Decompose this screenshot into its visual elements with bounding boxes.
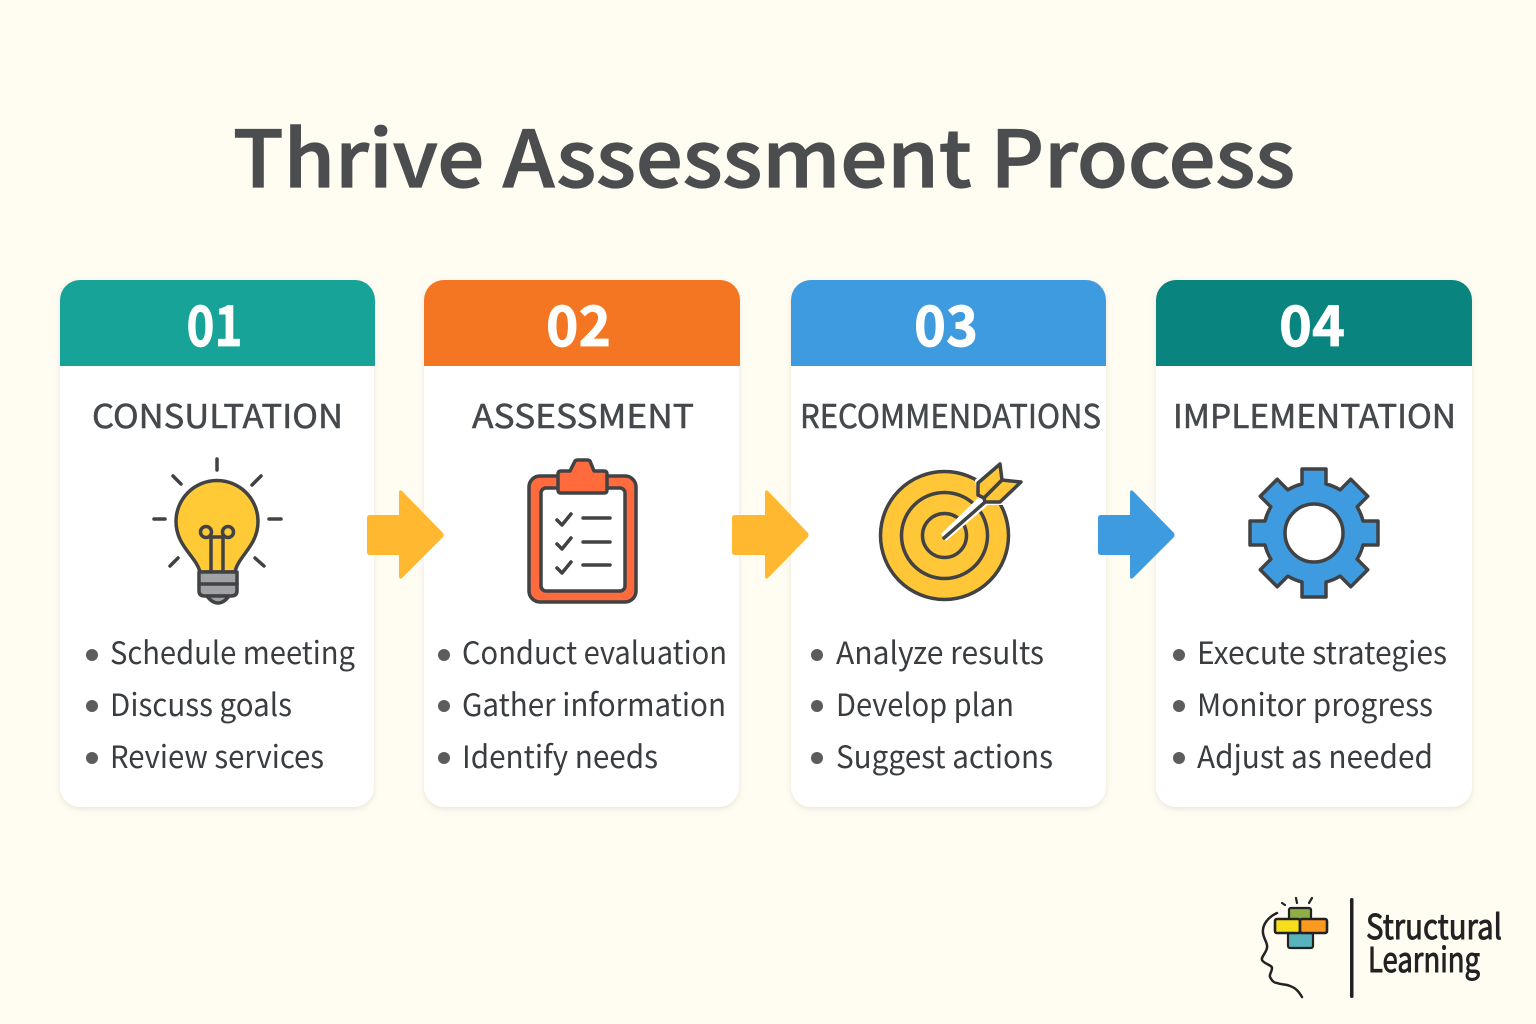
list: consultation bullets: Discuss goals [110,680,292,725]
list: recommendations bullets [811,628,1053,777]
list: assessment bullets: Conduct evaluation [462,628,727,673]
logo wordmark: Learning [1368,933,1480,982]
icon: clipboard [529,460,636,602]
list: consultation bullets [86,628,355,777]
icon: head with blocks [1262,898,1327,997]
panel: step 01 consultation [60,280,375,807]
arrow: step 2 to 3 [732,490,808,579]
logo wordmark: Structural [1366,900,1502,949]
list: consultation bullets: Schedule meeting [110,628,355,673]
heading: consultation: CONSULTATION [92,390,343,438]
panel: step 03 recommendations [791,280,1106,807]
header: 01: 01 [186,282,242,363]
list: implementation bullets [1173,628,1447,777]
header: 03: 03 [914,282,978,363]
list: implementation bullets: Adjust as needed [1197,732,1433,777]
list: implementation bullets: Execute strategies [1197,628,1447,673]
arrow: step 1 to 2 [367,490,444,579]
heading: assessment: ASSESSMENT [472,390,694,438]
panel: step 02 assessment [424,280,740,807]
logo: Structural Learning [1262,898,1502,998]
header: 04: 04 [1279,282,1345,363]
list: recommendations bullets: Suggest actions [836,732,1053,777]
title: Thrive Assessment Process [233,98,1295,210]
logo wordmark [1366,900,1502,982]
header: 02: 02 [546,282,611,363]
header: 04 [1156,280,1472,366]
heading: implementation: IMPLEMENTATION [1173,390,1456,438]
arrow: step 3 to 4 [1098,490,1174,579]
list: recommendations bullets: Analyze results [836,628,1044,673]
list: consultation bullets: Review services [110,732,324,777]
list: assessment bullets [438,628,727,777]
list: recommendations bullets: Develop plan [836,680,1014,725]
list: assessment bullets: Gather information [462,680,726,725]
icon: light bulb [154,459,281,603]
list: assessment bullets: Identify needs [462,732,658,777]
icon: gear [1250,469,1378,597]
header: 01 [60,280,375,366]
panel: step 04 implementation [1156,280,1472,807]
list: implementation bullets: Monitor progress [1197,680,1433,725]
icon: target with dart [880,456,1030,600]
heading: recommendations: RECOMMENDATIONS [800,390,1101,438]
header: 02 [424,280,740,366]
header: 03 [791,280,1106,366]
divider line [1350,898,1354,998]
